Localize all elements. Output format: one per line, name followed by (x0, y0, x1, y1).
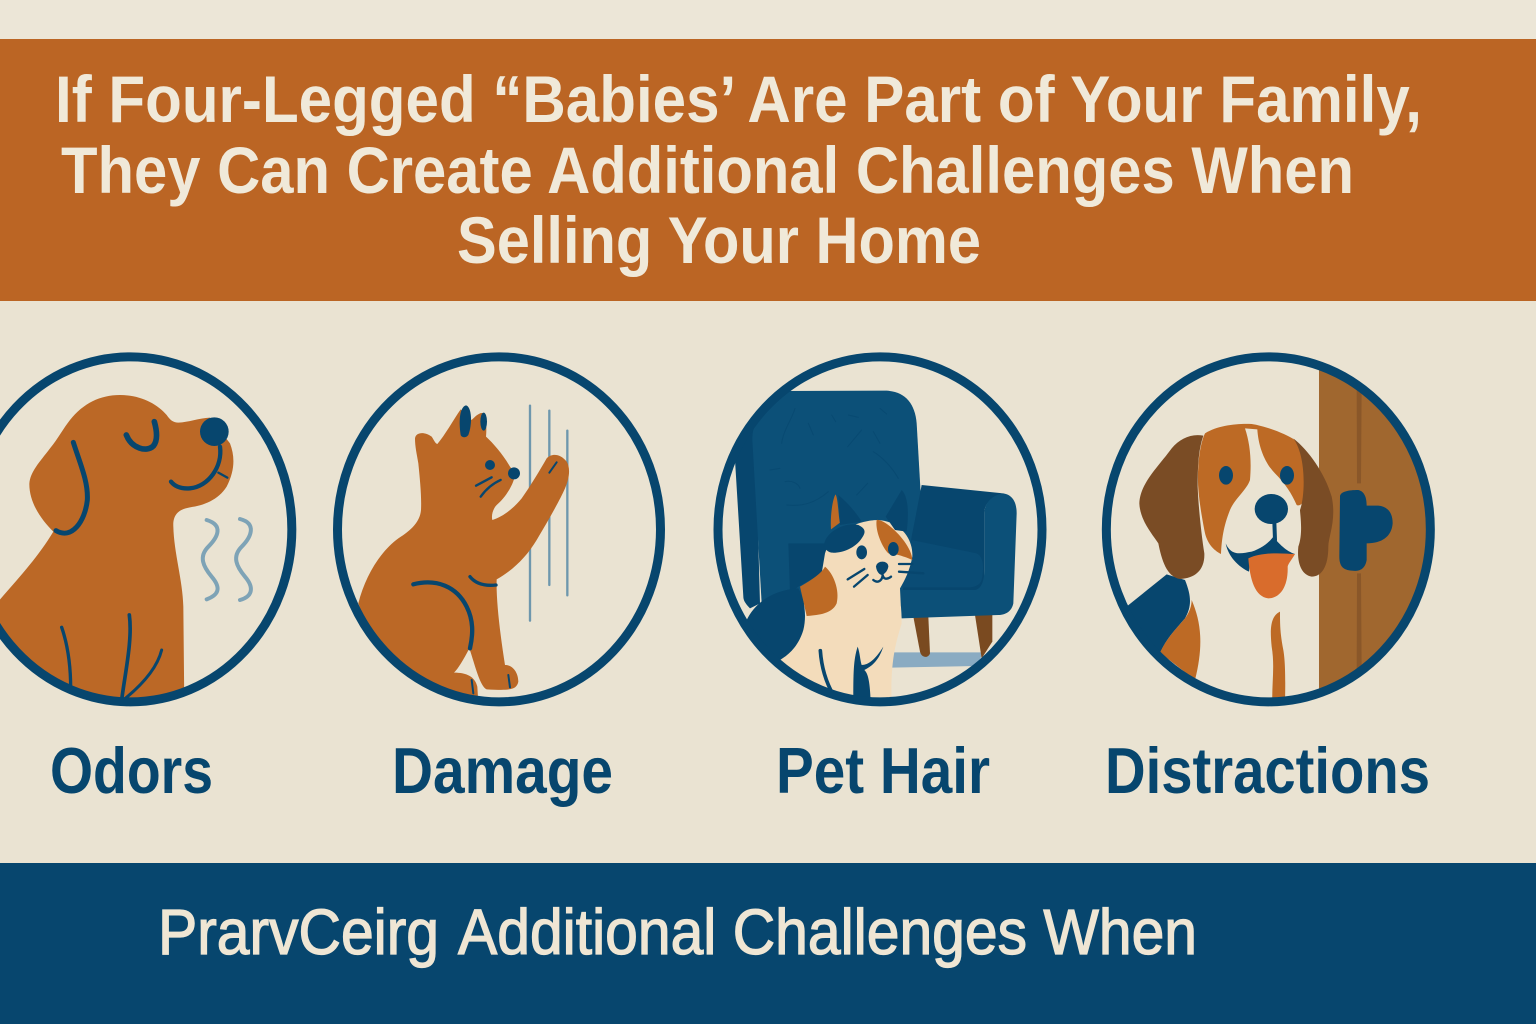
panel: distractions illustration (1106, 353, 1445, 707)
panel: damage illustration (337, 357, 660, 703)
panel: odors illustration (0, 357, 292, 707)
icon: cat scratching (358, 405, 569, 703)
title text: If Four-Legged “Babies’ Are Part of Your Family, (55, 62, 1422, 136)
label: distractions: Distractions (1105, 734, 1430, 807)
title text (55, 62, 1422, 277)
footer text (158, 896, 1197, 968)
label: damage: Damage (392, 734, 613, 807)
icon: blue armchair (725, 380, 1017, 668)
icon: door with knob (1319, 370, 1426, 688)
label: odors: Odors (50, 734, 213, 807)
icon: beagle (1115, 424, 1333, 703)
panel: pet hair illustration (718, 357, 1042, 703)
icon: odor wavy lines (203, 519, 251, 600)
title text: They Can Create Additional Challenges When (61, 133, 1354, 207)
icon: dog sniffing (0, 395, 233, 707)
icon: calico cat (747, 490, 912, 698)
title text: Selling Your Home (457, 203, 981, 277)
pet hair strands (770, 408, 898, 505)
footer text: PrarvCeirg (158, 896, 439, 968)
footer banner (0, 863, 1536, 1024)
footer text: Additional Challenges When (458, 896, 1197, 968)
label: pet hair: Pet Hair (776, 734, 990, 807)
title banner (0, 39, 1536, 301)
icon: scratch marks (530, 406, 567, 621)
